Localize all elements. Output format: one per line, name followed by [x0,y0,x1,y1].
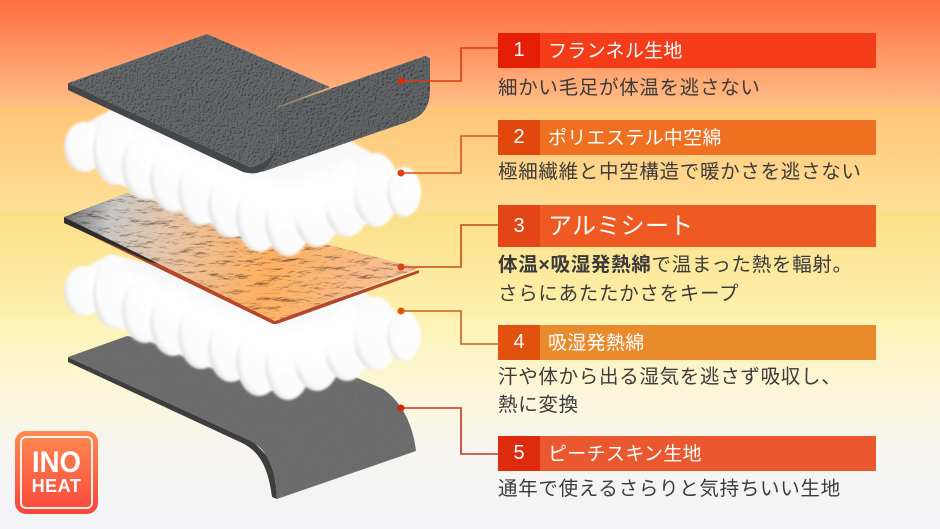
logo: INO HEAT: HEAT [32,476,81,496]
description 1: 細かい毛足が体温を逃さない [498,77,761,99]
heading bar 3 [498,205,876,247]
layer 2: polyester hollow cotton [64,110,421,256]
heading bar 3: 3 [513,215,525,237]
description 2: 極細繊維と中空構造で暖かさを逃さない [498,161,862,183]
heading bar 1: 1 [513,39,525,61]
connector 3 [398,225,498,270]
description 4: 熱に変換 [498,394,579,416]
connector 2 [398,136,498,176]
heading bar 2 [498,120,876,155]
heading bar 5: ピーチスキン生地 [548,444,702,465]
logo: INO HEAT [15,431,98,514]
layer 5: peach skin fabric [68,336,416,499]
description 4 [498,366,841,416]
heading bar 4: 吸湿発熱綿 [548,333,645,354]
layer 3: aluminium sheet [64,193,419,324]
description 5: 通年で使えるさらりと気持ちいい生地 [498,478,841,500]
heading bar 2: ポリエステル中空綿 [548,128,722,149]
description 3: さらにあたたかさをキープ [498,283,739,305]
connector 4 [398,308,498,344]
heading bar 1 [498,33,876,68]
layer 4: moisture-heating cotton [64,254,421,400]
description 3: 体温×吸湿発熱綿で温まった熱を輻射。 [498,254,853,276]
heading bar 4: 4 [513,331,525,353]
heading bar 4 [498,325,876,360]
layer 1: flannel fabric [68,34,430,173]
heading bar 1: フランネル生地 [548,41,683,62]
logo: INO HEAT: INO [32,446,81,479]
heading bar 5: 5 [513,442,525,464]
connector 1 [398,48,498,84]
description 3 [498,254,853,305]
connector 5 [398,404,498,454]
heading bar 2: 2 [513,126,525,148]
heading bar 3: アルミシート [548,213,694,240]
description 4: 汗や体から出る湿気を逃さず吸収し、 [498,366,841,388]
heading bar 5 [498,436,876,471]
